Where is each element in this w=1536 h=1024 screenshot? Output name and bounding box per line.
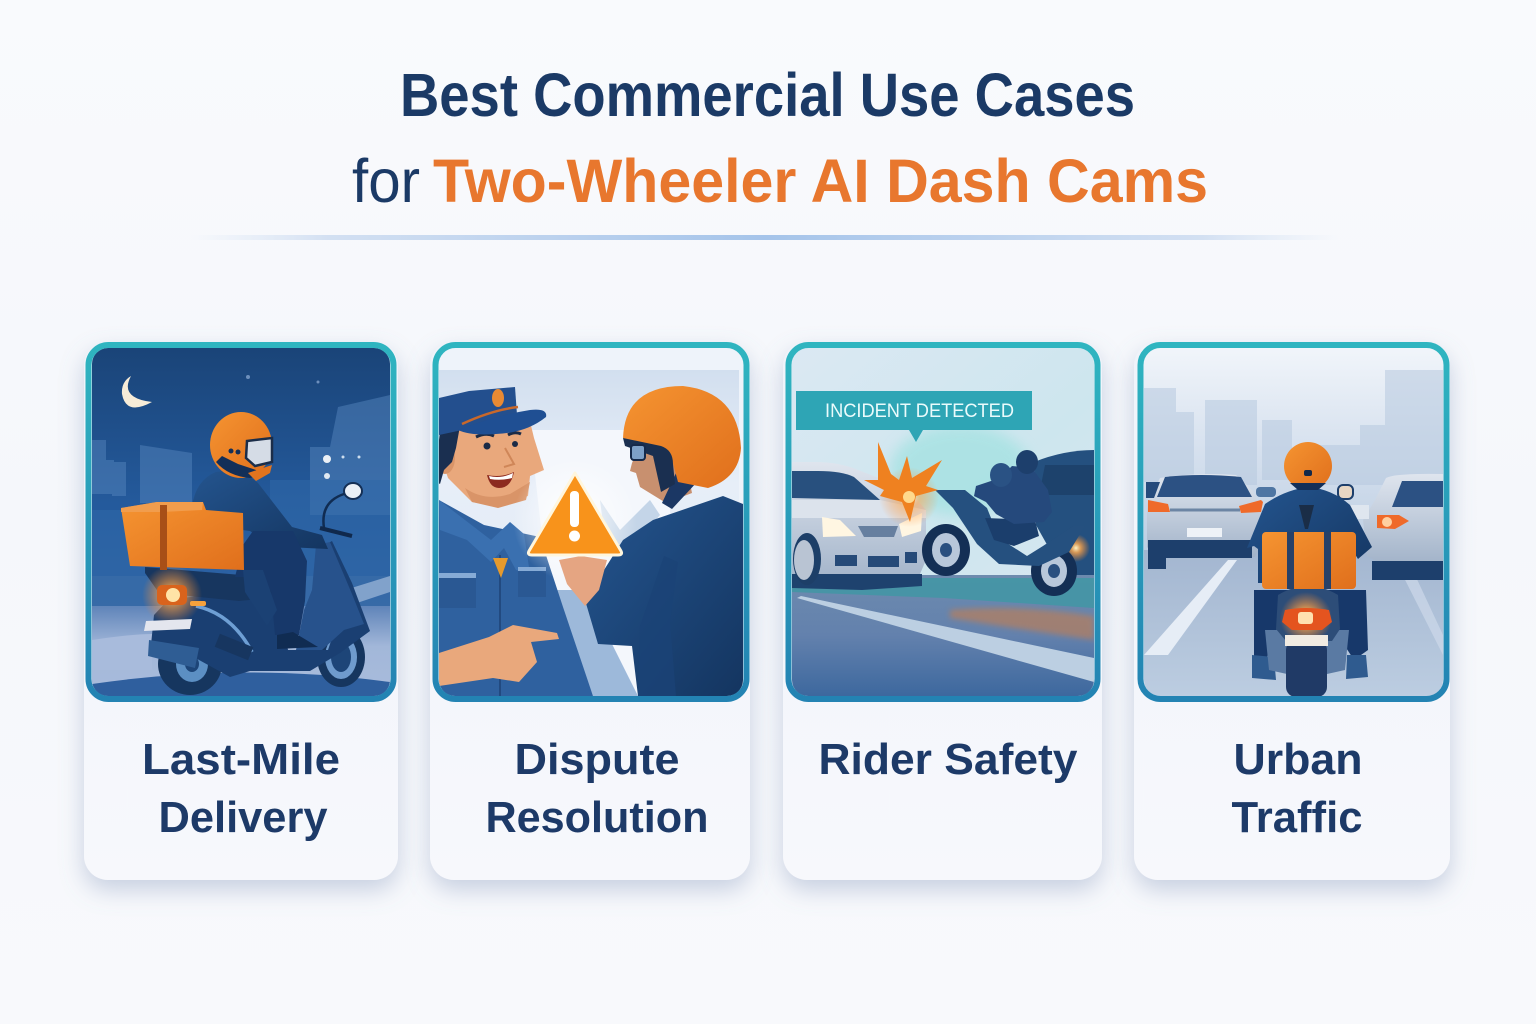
motorcycle front wheel xyxy=(922,524,970,576)
image frame xyxy=(788,345,1098,699)
title xyxy=(352,61,1208,215)
helmet xyxy=(1284,442,1332,490)
label xyxy=(486,735,708,842)
left car xyxy=(1147,474,1263,557)
warning glow xyxy=(516,484,628,574)
label: Rider Safety xyxy=(818,735,1078,784)
title line 1: Best Commercial Use Cases xyxy=(400,61,1135,129)
officer hand xyxy=(439,625,559,686)
officer cap xyxy=(439,387,517,435)
label: Dispute xyxy=(514,735,680,784)
tail light xyxy=(143,568,201,620)
card body xyxy=(1134,342,1450,880)
scooter body xyxy=(150,541,370,677)
car xyxy=(792,462,926,584)
rider torso xyxy=(1247,487,1372,583)
title line 2: for: for xyxy=(352,147,420,215)
dark car behind xyxy=(1034,450,1094,575)
title line 2: highlight: Two-Wheeler AI Dash Cams xyxy=(433,147,1208,215)
label: Delivery xyxy=(158,793,328,842)
rider on motorcycle xyxy=(974,466,1052,524)
rear wheel xyxy=(158,658,221,695)
illustration: collision xyxy=(792,348,1094,696)
motorcycle body xyxy=(935,490,1085,566)
front wheel xyxy=(318,638,365,687)
callout banner xyxy=(796,391,1032,442)
handlebar xyxy=(323,494,344,528)
label: Last-Mile xyxy=(142,735,340,784)
delivery box xyxy=(121,502,244,570)
panel: urban traffic xyxy=(1134,342,1450,880)
card body xyxy=(783,342,1102,880)
illustration: rider in traffic xyxy=(1144,348,1443,697)
officer badge xyxy=(493,558,508,578)
image frame xyxy=(1140,345,1446,699)
icon: crescent moon xyxy=(122,376,152,407)
motorcycle rear wheel xyxy=(1031,552,1077,596)
illustration: night delivery scooter xyxy=(92,348,390,696)
warning triangle xyxy=(528,473,622,555)
officer face xyxy=(446,426,544,502)
label xyxy=(1232,735,1362,842)
headlights xyxy=(822,517,856,537)
rider neck and face xyxy=(630,452,692,501)
rider jacket xyxy=(192,469,328,549)
mirror xyxy=(1338,485,1353,499)
plate xyxy=(1285,635,1328,646)
image frame xyxy=(88,345,394,699)
boot xyxy=(277,632,318,649)
officer uniform xyxy=(439,500,593,696)
image frame xyxy=(436,345,746,699)
delivery box xyxy=(1262,532,1356,589)
illustration: collision: INCIDENT DETECTED xyxy=(825,401,1014,422)
rider legs xyxy=(1254,590,1368,660)
right car xyxy=(1363,474,1443,564)
motorcycle rear xyxy=(1265,630,1349,674)
label xyxy=(142,735,340,842)
mirror xyxy=(344,483,362,499)
panel: rider safety xyxy=(783,342,1102,880)
rider helmet xyxy=(623,386,741,488)
rider hand xyxy=(559,556,607,606)
card body xyxy=(84,342,398,880)
rider legs xyxy=(235,531,307,635)
panel: last-mile delivery xyxy=(84,342,398,880)
helmet xyxy=(210,412,272,478)
plate xyxy=(144,619,192,631)
panel: dispute resolution xyxy=(430,342,750,880)
impact burst xyxy=(879,467,939,527)
label: Traffic xyxy=(1232,793,1362,842)
label: Urban xyxy=(1234,735,1362,784)
rider jacket xyxy=(585,496,743,696)
card body xyxy=(430,342,750,880)
illustration: officer and rider xyxy=(434,348,743,696)
label: Resolution xyxy=(486,793,708,842)
